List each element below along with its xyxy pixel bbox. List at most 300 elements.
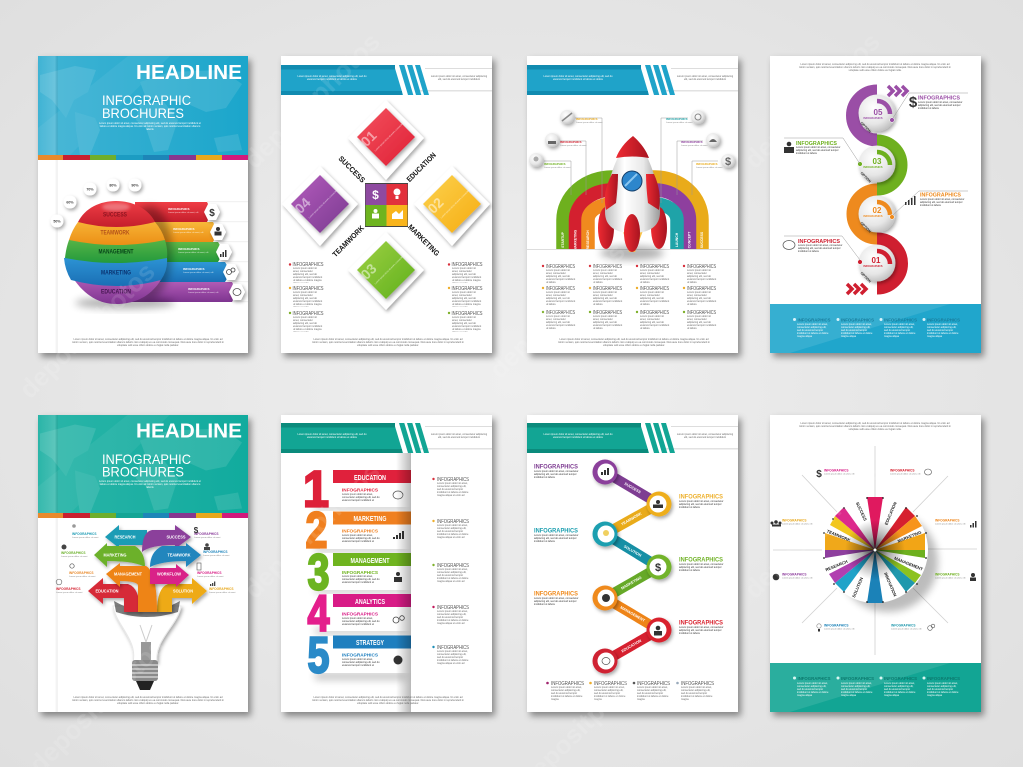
cover intro text: Lorem ipsum dolor sit amet, consectetur adipiscing elit, sed do eiusmod tempor incididunt ut labore et dolore magna aliqua. Ut enim ad minim veniam, quis nostrud exercitation ullamco laboris	[99, 480, 201, 489]
right page titles: INFOGRAPHICS	[437, 645, 469, 651]
footer titles: INFOGRAPHICS	[927, 318, 961, 324]
sphere side shadow	[128, 206, 172, 298]
arrow: solution	[157, 578, 207, 612]
ring titles: INFOGRAPHICS	[920, 192, 961, 198]
spheres	[858, 94, 896, 282]
ring numbers: 01	[872, 256, 881, 265]
wheel title text: Lorem ipsum dolor sit amet, elit	[782, 522, 813, 526]
subtitle	[102, 451, 191, 480]
diagonal labels	[331, 151, 442, 259]
ring sublabels: INFOGRAPHICS	[863, 117, 883, 120]
rainbow labels	[561, 229, 704, 250]
info grid titles: INFOGRAPHICS	[546, 264, 575, 270]
diamond numbers: 01	[357, 127, 380, 150]
info grid titles: INFOGRAPHICS	[593, 286, 622, 292]
info grid text column 4: Lorem ipsum dolor sit amet, consectetur adipiscing elit, sed do eiusmod tempor incididunt ut labore	[687, 315, 716, 330]
wheel titles: INFOGRAPHICS	[891, 624, 915, 628]
header banner	[281, 423, 492, 453]
diagonal labels: MARKETING	[406, 223, 442, 258]
page sheet	[281, 415, 492, 712]
callout icons	[529, 110, 735, 168]
ring sublabels: INFOGRAPHICS	[863, 166, 883, 169]
zigzag text 4: Lorem ipsum dolor sit amet, consectetur adipiscing elit, sed do eiusmod tempor incididunt ut labore	[679, 562, 723, 572]
percent bubbles: 90%	[131, 184, 139, 188]
info column right: INFOGRAPHICS	[452, 286, 483, 292]
callout text: Lorem ipsum dolor sit amet	[696, 166, 723, 169]
zigzag titles: INFOGRAPHICS	[534, 592, 578, 598]
card text 2: Lorem ipsum dolor sit amet, consectetur adipiscing elit, sed do eiusmod tempor incididunt ut	[342, 534, 380, 542]
info column right: INFOGRAPHICS	[452, 311, 483, 317]
page sheet	[38, 56, 248, 353]
zigzag titles	[534, 464, 723, 626]
layered sphere	[64, 201, 167, 304]
subtitle: BROCHURES	[102, 105, 184, 121]
card titles: INFOGRAPHICS	[342, 528, 378, 534]
diamond: green	[348, 232, 424, 310]
ribbon caption text: Lorem ipsum dolor sit amet, elit	[173, 231, 204, 234]
callout text: Lorem ipsum dolor sit amet	[560, 144, 587, 147]
ring nodes	[858, 118, 894, 264]
info grid titles: INFOGRAPHICS	[687, 310, 716, 316]
bulb side text	[56, 536, 236, 594]
subtitle: INFOGRAPHIC	[102, 92, 191, 108]
diamond captions: Lorem ipsum dolor sit amet, consectetur	[308, 188, 339, 219]
footer titles: INFOGRAPHICS	[798, 318, 831, 324]
watermarks: depositphotos	[238, 26, 386, 174]
bulb rim	[114, 601, 180, 617]
ribbons	[125, 202, 248, 302]
sphere labels	[98, 212, 134, 296]
arrow: education	[88, 578, 140, 612]
bulb side labels: INFOGRAPHICS	[72, 532, 96, 536]
centre point	[874, 548, 876, 552]
right page text 1: Lorem ipsum dolor sit amet, consectetur adipiscing elit, sed do eiusmod tempor incididunt ut labore et dolore magna aliqua ut enim ad	[437, 482, 468, 497]
diamond numbers: 02	[424, 194, 447, 217]
arrow labels: MARKETING	[104, 552, 127, 558]
wheel title text: Lorem ipsum dolor sit amet, elit	[891, 628, 922, 630]
footer text 1: Lorem ipsum dolor sit amet, consectetur adipiscing elit, sed do eiusmod tempor incididunt ut labore et dolore magna aliqua	[797, 323, 828, 338]
info grid text column 2	[593, 269, 623, 335]
arrow labels: RESEARCH	[114, 534, 136, 540]
card titles: INFOGRAPHICS	[342, 612, 378, 616]
big numbers: 4	[308, 584, 330, 642]
headline: HEADLINE	[136, 62, 242, 84]
rocket shadow	[600, 246, 664, 260]
cover intro text: Lorem ipsum dolor sit amet, consectetur adipiscing elit, sed do eiusmod tempor incididunt ut labore et dolore magna aliqua. Ut enim ad minim veniam, quis nostrud exercitation ullamco laboris	[99, 122, 201, 130]
wheel labels	[825, 501, 924, 598]
info grid text column 4	[687, 269, 717, 335]
right page titles: INFOGRAPHICS	[437, 519, 469, 525]
ring titles: INFOGRAPHICS	[796, 141, 837, 147]
colour band	[38, 155, 248, 160]
footer titles	[793, 318, 961, 324]
ribbon labels: STRATEGY	[356, 640, 384, 647]
top text: Lorem ipsum dolor sit amet, consectetur adipiscing elit, sed do eiusmod tempor incididunt ut labore et dolore magna aliqua. Ut enim ad minim veniam, quis nostrud exercitation ullamco laboris nisi ut aliquip ex ea commodo consequat. Duis aute irure dolor in reprehenderit in voluptate velit esse cillum dolore eu fugiat nulla.	[799, 63, 951, 72]
zigzag titles: INFOGRAPHICS	[679, 494, 723, 500]
ring titles: INFOGRAPHICS	[798, 239, 840, 245]
footer text: Lorem ipsum dolor sit amet, consectetur adipiscing elit, sed do eiusmod tempor incididunt ut labore et dolore magna aliqua. Ut enim ad minim veniam, quis nostrud exercitation ullamco laboris nisi ut aliquip ex ea commodo consequat. Duis aute irure dolor in reprehenderit in voluptate velit esse cillum dolore eu fugiat nulla pariatur.	[312, 338, 464, 347]
wheel labels: EDUCATION	[884, 501, 898, 526]
info grid titles	[542, 264, 716, 316]
zigzag text 5: Lorem ipsum dolor sit amet, consectetur adipiscing elit, sed do eiusmod tempor incididunt ut labore	[534, 596, 578, 606]
header text left: Lorem ipsum dolor sit amet, consectetur adipiscing elit, sed do eiusmod tempor incididunt ut labore et dolore	[543, 75, 613, 81]
watermarks: depositphotos	[738, 456, 886, 604]
callout labels: INFOGRAPHICS	[560, 140, 582, 144]
big numbers: 3	[308, 544, 330, 600]
connector labels: TEAMWORK	[621, 512, 643, 527]
ring icons	[783, 94, 918, 250]
bulb side labels: INFOGRAPHICS	[197, 571, 221, 575]
footer text 2: Lorem ipsum dolor sit amet, consectetur adipiscing elit, sed do eiusmod tempor incididunt ut labore et dolore magna aliqua	[841, 323, 872, 338]
sphere labels: EDUCATION	[101, 288, 131, 296]
connector labels: SUCCESS	[624, 482, 642, 495]
header banner	[281, 65, 492, 95]
zigzag titles: INFOGRAPHICS	[679, 620, 723, 626]
arrow labels: TEAMWORK	[168, 552, 191, 558]
ring numbers: 05	[874, 108, 883, 117]
info grid text column 4: Lorem ipsum dolor sit amet, consectetur adipiscing elit, sed do eiusmod tempor incididunt ut labore	[687, 269, 716, 284]
card shadows	[315, 504, 405, 680]
ring captions: OPTION	[860, 171, 872, 184]
arrow: success	[142, 525, 191, 552]
ribbon labels: MARKETING	[354, 516, 387, 523]
callout glyphs: $	[725, 156, 731, 168]
callout labels: INFOGRAPHICS	[576, 117, 598, 121]
zigzag titles: INFOGRAPHICS	[679, 558, 723, 564]
sphere labels: TEAMWORK	[100, 230, 130, 236]
wheel titles: INFOGRAPHICS	[782, 518, 806, 522]
info grid text column 1: Lorem ipsum dolor sit amet, consectetur adipiscing elit, sed do eiusmod tempor incididunt ut labore	[546, 269, 575, 284]
ring body 2: Lorem ipsum dolor sit amet, consectetur adipiscing elit, sed do eiusmod tempor incididunt ut labore	[796, 146, 840, 155]
cover header	[38, 415, 248, 513]
bulb side icons	[56, 524, 215, 586]
footer text 3: Lorem ipsum dolor sit amet, consectetur adipiscing elit, sed do eiusmod tempor incididunt ut labore et dolore magna aliqua	[884, 323, 915, 338]
diamond captions: Lorem ipsum dolor sit amet, consectetur	[374, 121, 405, 152]
rainbow labels: SUCCESS	[700, 231, 704, 248]
header text right: Lorem ipsum dolor sit amet, consectetur adipiscing elit, sed do eiusmod tempor incididunt	[431, 433, 487, 439]
ring captions: OPTION	[860, 121, 872, 134]
info grid titles: INFOGRAPHICS	[687, 264, 716, 270]
footer text: Lorem ipsum dolor sit amet, consectetur adipiscing elit, sed do eiusmod tempor incididunt ut labore et dolore magna aliqua. Ut enim ad minim veniam, quis nostrud exercitation ullamco laboris nisi ut aliquip ex ea commodo consequat. Duis aute irure dolor in reprehenderit in voluptate velit esse cillum dolore eu fugiat nulla pariatur.	[558, 338, 710, 347]
wheel labels: INNOVATION	[883, 572, 898, 597]
zigzag titles: INFOGRAPHICS	[534, 528, 578, 534]
lower white panel	[527, 249, 738, 353]
card text 1: Lorem ipsum dolor sit amet, consectetur adipiscing elit, sed do eiusmod tempor incididunt ut	[342, 492, 380, 502]
ribbon caption text: Lorem ipsum dolor sit amet, elit	[183, 271, 214, 274]
footer text: Lorem ipsum dolor sit amet, consectetur adipiscing elit, sed do eiusmod tempor incididunt ut labore et dolore magna aliqua. Ut enim ad minim veniam, quis nostrud exercitation ullamco laboris nisi ut aliquip ex ea commodo consequat. Duis aute irure dolor in reprehenderit in voluptate velit esse cillum dolore eu fugiat nulla pariatur.	[72, 696, 224, 705]
headline: HEADLINE	[136, 420, 242, 442]
inner arcs	[877, 101, 890, 264]
info grid titles: INFOGRAPHICS	[546, 286, 575, 292]
sphere labels: SUCCESS	[103, 212, 128, 218]
diamond: purple	[282, 166, 358, 246]
bottom titles: INFOGRAPHICS	[594, 681, 627, 687]
percent bubbles: 80%	[109, 184, 117, 188]
ribbon icons	[204, 204, 245, 300]
footer band	[770, 663, 981, 712]
bottom text 1: Lorem ipsum dolor sit amet, consectetur adipiscing elit, sed do eiusmod tempor incididunt ut labore et dolore magna	[551, 686, 582, 701]
timeline nodes	[592, 460, 672, 674]
ribbon captions	[168, 207, 210, 291]
footer text 3: Lorem ipsum dolor sit amet, consectetur adipiscing elit, sed do eiusmod tempor incididunt ut labore et dolore magna aliqua	[884, 682, 915, 696]
header text left: Lorem ipsum dolor sit amet, consectetur adipiscing elit, sed do eiusmod tempor incididunt ut labore et dolore	[543, 433, 613, 439]
info column left: INFOGRAPHICS	[292, 286, 324, 292]
wheel icons: $	[816, 469, 822, 480]
subtitle: INFOGRAPHIC	[102, 451, 191, 467]
diamond: yellow	[414, 166, 490, 246]
wheel labels: MANAGEMENT	[893, 556, 924, 572]
bottom text 3: Lorem ipsum dolor sit amet, consectetur adipiscing elit, sed do eiusmod tempor incididunt ut labore et dolore magna	[637, 686, 668, 701]
ring sublabels: INFOGRAPHICS	[863, 215, 883, 218]
footer titles: INFOGRAPHICS	[884, 318, 918, 324]
right page titles: INFOGRAPHICS	[437, 477, 469, 483]
zigzag text 3: Lorem ipsum dolor sit amet, consectetur adipiscing elit, sed do eiusmod tempor incididunt ut labore	[534, 534, 578, 542]
wheel titles: INFOGRAPHICS	[935, 572, 959, 576]
percent bubbles: 50%	[53, 220, 61, 224]
ring numbers: 02	[873, 206, 882, 215]
wheel title text: Lorem ipsum dolor sit amet, elit	[935, 576, 966, 580]
footer titles: INFOGRAPHICS	[884, 676, 918, 682]
callout text: Lorem ipsum dolor sit amet	[681, 144, 708, 147]
bulb side labels: INFOGRAPHICS	[61, 551, 85, 555]
bulb side text: Lorem ipsum dolor sit amet	[203, 554, 230, 557]
page sheet	[527, 415, 738, 712]
rainbow labels: CONCEPT	[688, 231, 692, 248]
footer text 1: Lorem ipsum dolor sit amet, consectetur adipiscing elit, sed do eiusmod tempor incididunt ut labore et dolore magna aliqua	[797, 682, 828, 696]
bulb side text: Lorem ipsum dolor sit amet	[69, 575, 96, 578]
header banner	[527, 423, 738, 453]
diamond captions	[308, 121, 471, 285]
card titles: INFOGRAPHICS	[342, 570, 378, 575]
percent bubbles	[50, 178, 142, 228]
connector labels: MARKETING	[621, 576, 642, 591]
callout lines	[544, 118, 718, 203]
arrow: teamwork	[150, 543, 201, 567]
wheel labels: MARKETING	[897, 530, 922, 544]
bulb side labels: INFOGRAPHICS	[194, 532, 218, 536]
diamond numbers: 04	[291, 194, 314, 217]
node icons: $	[655, 562, 661, 574]
wheel titles: INFOGRAPHICS	[782, 572, 806, 576]
ribbon labels: EDUCATION	[354, 475, 386, 482]
ribbon caption text: Lorem ipsum dolor sit amet, elit	[188, 291, 219, 294]
info grid text column 4: Lorem ipsum dolor sit amet, consectetur adipiscing elit, sed do eiusmod tempor incididunt ut labore	[687, 291, 716, 306]
footer text: Lorem ipsum dolor sit amet, consectetur adipiscing elit, sed do eiusmod tempor incididunt ut labore et dolore magna aliqua. Ut enim ad minim veniam, quis nostrud exercitation ullamco laboris nisi ut aliquip ex ea commodo consequat. Duis aute irure dolor in reprehenderit in voluptate velit esse cillum dolore eu fugiat nulla pariatur.	[312, 696, 464, 705]
rainbow labels: STARTUP	[561, 231, 565, 248]
chevrons	[847, 86, 907, 294]
header text right: Lorem ipsum dolor sit amet, consectetur adipiscing elit, sed do eiusmod tempor incididunt	[431, 75, 487, 81]
ribbon captions: INFOGRAPHICS	[168, 207, 190, 211]
bottom text 2: Lorem ipsum dolor sit amet, consectetur adipiscing elit, sed do eiusmod tempor incididunt ut labore et dolore magna	[594, 686, 625, 701]
panel: stacked rings brochure	[770, 56, 981, 353]
rainbow labels: MARKETING	[574, 229, 578, 250]
arrow: research	[105, 525, 147, 548]
panel: cover brochure with bulb	[38, 414, 248, 712]
wheel icons	[770, 469, 976, 632]
wheel labels: SOLUTION	[851, 576, 864, 598]
watermarks: depositphotos	[483, 236, 631, 384]
icon glyphs	[209, 208, 241, 296]
right page titles: INFOGRAPHICS	[437, 563, 469, 569]
callout text: Lorem ipsum dolor sit amet	[544, 166, 571, 169]
wheel titles: INFOGRAPHICS	[935, 518, 959, 522]
diagonal labels: SUCCESS	[337, 154, 367, 184]
ring sublabels	[863, 117, 883, 268]
bulb side icons: $	[194, 526, 199, 535]
arrow: management	[106, 563, 157, 612]
ribbon captions: INFOGRAPHICS	[178, 247, 200, 251]
callout labels: INFOGRAPHICS	[666, 117, 688, 121]
header text left: Lorem ipsum dolor sit amet, consectetur adipiscing elit, sed do eiusmod tempor incididunt ut labore et dolore	[297, 433, 367, 439]
top text: Lorem ipsum dolor sit amet, consectetur adipiscing elit, sed do eiusmod tempor incididunt ut labore et dolore magna aliqua. Ut enim ad minim veniam, quis nostrud exercitation ullamco laboris nisi ut aliquip ex ea commodo consequat. Duis aute irure dolor in reprehenderit in voluptate velit esse cillum dolore eu fugiat nulla.	[799, 422, 951, 431]
connector labels: MANAGEMENT	[620, 605, 646, 623]
wheel titles	[782, 468, 959, 628]
callout text	[544, 121, 723, 169]
panel: wheel brochure	[770, 415, 981, 712]
sphere labels: MANAGEMENT	[98, 248, 134, 256]
page sheet	[770, 415, 981, 712]
wheel title text	[782, 472, 966, 630]
wheel title text: Lorem ipsum dolor sit amet, elit	[935, 522, 966, 526]
ribbon labels	[350, 475, 390, 647]
diamond: red	[348, 100, 424, 180]
wheel titles: INFOGRAPHICS	[824, 624, 848, 628]
ring titles: INFOGRAPHICS	[918, 96, 960, 102]
right page titles: INFOGRAPHICS	[437, 605, 469, 611]
wheel disc	[822, 497, 928, 603]
ribbon caption text	[168, 211, 219, 294]
bulb side text: Lorem ipsum dolor sit amet	[194, 536, 221, 539]
header text right: Lorem ipsum dolor sit amet, consectetur adipiscing elit, sed do eiusmod tempor incididunt	[677, 75, 733, 81]
rocket	[598, 136, 667, 252]
ribbon captions: INFOGRAPHICS	[183, 267, 205, 271]
rainbow arcs	[563, 177, 702, 250]
wheel labels: RESEARCH	[825, 559, 848, 572]
diamond numbers	[291, 127, 447, 283]
ring numbers: 03	[873, 157, 882, 166]
watermarks: depositphotos	[13, 256, 161, 404]
info grid titles: INFOGRAPHICS	[640, 264, 669, 270]
arrow labels: SOLUTION	[173, 588, 193, 594]
wheel centre shading	[845, 520, 905, 580]
big numbers: 2	[306, 502, 328, 558]
bulb side labels: INFOGRAPHICS	[209, 587, 233, 591]
ring body 1: Lorem ipsum dolor sit amet, consectetur adipiscing elit, sed do eiusmod tempor incididunt ut labore	[918, 100, 962, 110]
node icons	[601, 468, 663, 664]
info grid text column 3: Lorem ipsum dolor sit amet, consectetur adipiscing elit, sed do eiusmod tempor incididunt ut labore	[640, 291, 669, 306]
ring icons: $	[909, 94, 918, 111]
panel: numbered steps brochure	[281, 415, 492, 712]
bottom titles	[546, 681, 714, 687]
zigzag text 1: Lorem ipsum dolor sit amet, consectetur adipiscing elit, sed do eiusmod tempor incididunt ut labore	[534, 470, 578, 478]
wheel wedges	[825, 497, 925, 603]
card titles: INFOGRAPHICS	[342, 488, 378, 492]
rim dots	[823, 497, 927, 603]
watermarks: depositphotos	[738, 26, 886, 174]
footer text 4: Lorem ipsum dolor sit amet, consectetur adipiscing elit, sed do eiusmod tempor incididunt ut labore et dolore magna aliqua	[927, 682, 958, 696]
page sheet	[527, 56, 738, 353]
card text 4: Lorem ipsum dolor sit amet, consectetur adipiscing elit, sed do eiusmod tempor incididunt ut	[342, 616, 380, 626]
light bulb	[113, 606, 181, 690]
zigzag text 6: Lorem ipsum dolor sit amet, consectetur adipiscing elit, sed do eiusmod tempor incididunt ut labore	[679, 626, 723, 634]
ribbon labels: ANALYTICS	[355, 599, 385, 606]
rainbow labels: LAUNCH	[675, 232, 679, 247]
bulb side labels: INFOGRAPHICS	[56, 587, 80, 591]
zigzag connectors	[605, 472, 659, 661]
subtitle	[102, 92, 191, 121]
wheel title text: Lorem ipsum dolor sit amet, elit	[824, 472, 855, 476]
wheel title text: Lorem ipsum dolor sit amet, elit	[824, 628, 855, 630]
subtitle: BROCHURES	[102, 464, 184, 480]
card icons	[393, 491, 404, 664]
world map	[38, 414, 242, 514]
big numbers: 5	[308, 626, 330, 684]
info grid text column 1: Lorem ipsum dolor sit amet, consectetur adipiscing elit, sed do eiusmod tempor incididunt ut labore	[546, 315, 575, 330]
info grid text column 3	[640, 269, 670, 335]
ring captions: OPTION	[860, 271, 872, 284]
cover header	[38, 56, 248, 155]
footer titles: INFOGRAPHICS	[798, 676, 831, 682]
bottom titles: INFOGRAPHICS	[551, 681, 584, 687]
bottom text 4: Lorem ipsum dolor sit amet, consectetur adipiscing elit, sed do eiusmod tempor incididunt ut labore et dolore magna	[681, 686, 712, 701]
callout labels: INFOGRAPHICS	[696, 162, 718, 166]
info column right: INFOGRAPHICS	[452, 262, 483, 268]
info grid titles: INFOGRAPHICS	[593, 310, 622, 316]
bulb side text: Lorem ipsum dolor sit amet	[209, 591, 236, 594]
info grid titles: INFOGRAPHICS	[640, 286, 669, 292]
card text 5: Lorem ipsum dolor sit amet, consectetur adipiscing elit, sed do eiusmod tempor incididunt ut	[342, 658, 380, 666]
colour band	[38, 513, 248, 518]
arrow labels: SUCCESS	[166, 534, 186, 540]
big numbers: 1	[303, 460, 329, 518]
arrow: marketing	[94, 543, 145, 567]
spine highlight	[38, 56, 58, 353]
ring numbers	[872, 108, 883, 265]
diamond captions: Lorem ipsum dolor sit amet, consectetur	[374, 254, 405, 285]
ribbon caption text: Lorem ipsum dolor sit amet, elit	[178, 251, 209, 254]
ring body 3: Lorem ipsum dolor sit amet, consectetur adipiscing elit, sed do eiusmod tempor incididunt ut labore	[920, 198, 964, 206]
node faces	[598, 464, 666, 670]
panel: diamonds brochure	[281, 56, 492, 353]
wheel labels: TEAMWORK	[826, 529, 851, 543]
diagonal labels: EDUCATION	[405, 151, 438, 184]
info grid text column 3: Lorem ipsum dolor sit amet, consectetur adipiscing elit, sed do eiusmod tempor incididunt ut labore	[640, 315, 669, 330]
ring body 4: Lorem ipsum dolor sit amet, consectetur adipiscing elit, sed do eiusmod tempor incididunt ut labore	[798, 244, 842, 253]
panel: rocket brochure	[527, 56, 738, 353]
bottom titles: INFOGRAPHICS	[637, 681, 670, 687]
bulb side text: Lorem ipsum dolor sit amet	[56, 591, 83, 594]
info column left: INFOGRAPHICS	[292, 311, 324, 317]
ring titles	[796, 96, 961, 245]
info column left: INFOGRAPHICS	[292, 262, 324, 268]
callout text: Lorem ipsum dolor sit amet	[576, 121, 603, 124]
info grid titles: INFOGRAPHICS	[640, 310, 669, 316]
ribbon captions: INFOGRAPHICS	[188, 287, 210, 291]
percent bubbles: 70%	[86, 188, 94, 192]
bulb side text: Lorem ipsum dolor sit amet	[72, 536, 99, 539]
right page text 5: Lorem ipsum dolor sit amet, consectetur adipiscing elit, sed do eiusmod tempor incididunt ut labore et dolore magna aliqua ut enim ad	[437, 650, 468, 665]
callout labels: INFOGRAPHICS	[681, 140, 703, 144]
bulb side labels: INFOGRAPHICS	[203, 550, 227, 554]
right page text 3: Lorem ipsum dolor sit amet, consectetur adipiscing elit, sed do eiusmod tempor incididunt ut labore et dolore magna aliqua ut enim ad	[437, 568, 468, 583]
watermarks: depositphotos	[238, 456, 386, 604]
connector labels: SOLUTION	[623, 544, 642, 558]
card text 3: Lorem ipsum dolor sit amet, consectetur adipiscing elit, sed do eiusmod tempor incididunt ut	[342, 575, 380, 584]
header banner	[527, 65, 738, 95]
page sheet	[770, 56, 981, 353]
footer text 2: Lorem ipsum dolor sit amet, consectetur adipiscing elit, sed do eiusmod tempor incididunt ut labore et dolore magna aliqua	[841, 682, 872, 696]
world map	[38, 56, 242, 155]
